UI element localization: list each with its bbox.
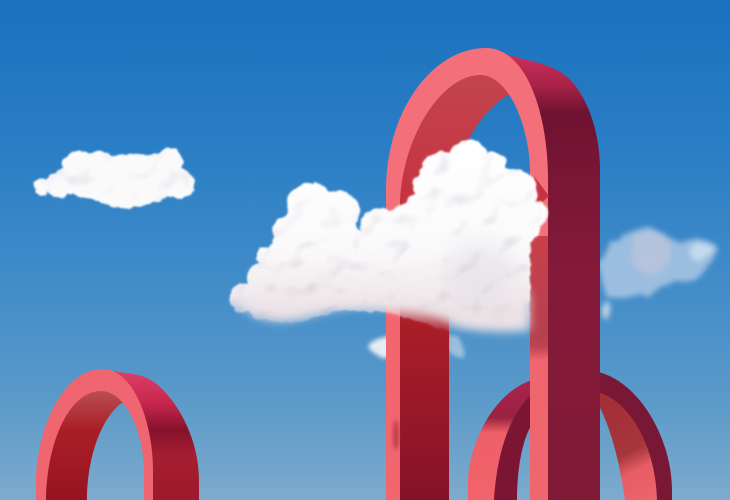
- main cloud: [230, 140, 548, 338]
- cloud soft lower haze: [236, 286, 529, 331]
- main arch inner surface: [392, 68, 512, 500]
- small red arch, bottom left: [36, 369, 199, 500]
- arch outer side: [106, 370, 199, 500]
- main arch outer side: [506, 54, 600, 500]
- dark notch behind cloud edge: [534, 176, 549, 206]
- small cloud wisp below main cloud, left of pillar: [368, 336, 390, 358]
- main arch front face: [386, 48, 548, 500]
- third arch dark face, right: [598, 372, 672, 500]
- cloud shadow on left pillar: [393, 420, 399, 450]
- third arch lit outer side: [468, 380, 532, 500]
- main red arch: [386, 48, 600, 500]
- cloud body: [230, 140, 548, 338]
- cloud soft shading: [446, 240, 514, 300]
- shaded strip of the right leg: [530, 236, 548, 500]
- third red arch behind the main arch: [468, 372, 672, 500]
- arch front face: [36, 369, 153, 500]
- third arch inner surface, right: [598, 388, 662, 500]
- arch inner surface: [40, 386, 123, 500]
- left cloud: [34, 149, 196, 208]
- left pillar front strip: [386, 300, 400, 500]
- small cloud wisp below main cloud, right of pillar: [448, 335, 465, 358]
- third arch dark face, left: [494, 394, 532, 500]
- distant faded cloud on the right: [600, 228, 718, 319]
